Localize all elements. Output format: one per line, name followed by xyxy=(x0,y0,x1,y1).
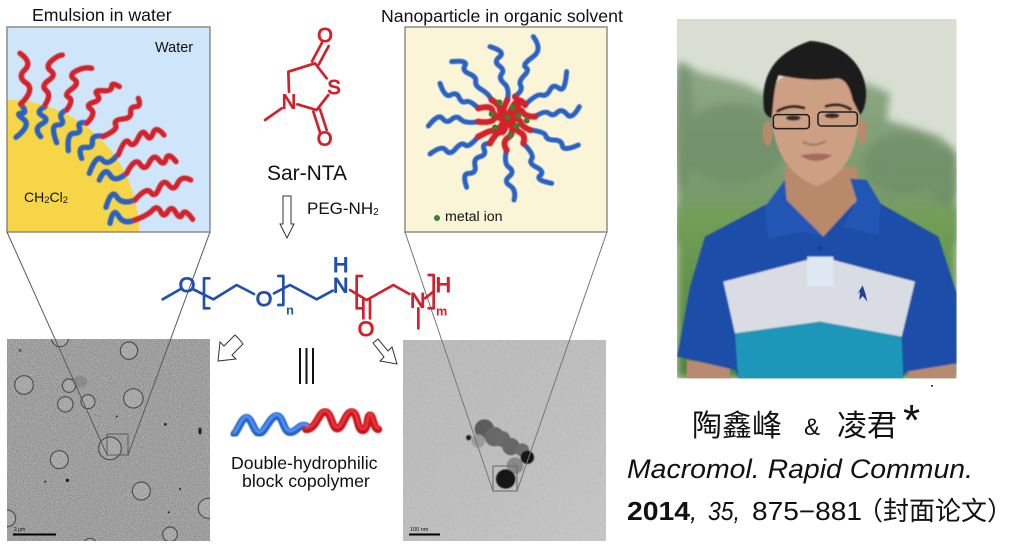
PEG block: H xyxy=(333,253,348,277)
citation: 2014 xyxy=(627,496,691,526)
asterisk: * xyxy=(903,396,920,445)
blue corona arms xyxy=(428,37,579,200)
molecule: Sar-NTA: O xyxy=(317,128,332,150)
legend: metal ion: metal ion xyxy=(445,209,503,225)
molecule: Sar-NTA: N xyxy=(282,92,296,114)
equivalence bars xyxy=(299,348,314,384)
citation: 35, xyxy=(708,496,740,526)
heading: emulsion in water: Emulsion in water xyxy=(32,5,172,25)
collar xyxy=(765,178,881,238)
caption: double-hydrophilic block copolymer: Double-hydrophilic xyxy=(231,453,378,473)
photo: portrait xyxy=(673,19,957,380)
background trees xyxy=(677,62,957,243)
shirt teal band xyxy=(735,322,903,380)
label: water: Water xyxy=(155,40,193,56)
metal ions xyxy=(489,99,530,138)
label: CH2Cl2: Cl xyxy=(50,189,63,205)
micelle with metal ions xyxy=(428,37,579,200)
ears xyxy=(763,121,772,146)
hair xyxy=(763,41,866,118)
PEG block: N xyxy=(333,273,348,297)
shirt white band xyxy=(723,260,915,337)
PEG block: O xyxy=(179,273,195,297)
face xyxy=(771,69,859,186)
placket xyxy=(807,257,833,286)
shirt logo xyxy=(857,285,867,302)
caption: double-hydrophilic block copolymer: block copolymer xyxy=(242,471,370,491)
panel background: water xyxy=(7,27,210,232)
molecule: Sar-NTA: S xyxy=(327,77,341,99)
caption: double-hydrophilic block copolymer xyxy=(231,453,378,491)
label: CH2Cl2: 2 xyxy=(63,195,68,206)
polysarcosine block: N xyxy=(410,288,425,312)
mouth xyxy=(800,153,833,161)
PEG block: O xyxy=(256,287,272,311)
molecule: Sar-NTA xyxy=(265,25,341,150)
label: CH2Cl2: CH xyxy=(24,189,44,205)
arrow: to emulsion image xyxy=(218,335,243,361)
tick mark xyxy=(931,385,933,386)
arms xyxy=(687,360,955,380)
panel border xyxy=(7,27,210,232)
eyes xyxy=(786,115,801,121)
panel: emulsion in water xyxy=(6,8,211,233)
molecule: Sar-NTA: O xyxy=(317,25,333,47)
eyebrows xyxy=(777,105,852,112)
darker tree masses xyxy=(673,63,957,207)
citation: （封面论文） xyxy=(857,496,1013,526)
dark specks xyxy=(18,349,202,513)
polysarcosine block: O xyxy=(358,317,374,341)
polysarcosine block xyxy=(350,273,451,341)
PEG block: n xyxy=(286,304,294,318)
label: Sar-NTA: Sar-NTA xyxy=(267,162,347,185)
emulsion droplets xyxy=(7,339,210,541)
background grass xyxy=(677,207,957,378)
icon: copolymer ribbon xyxy=(234,411,378,434)
TEM image: emulsion xyxy=(7,339,210,541)
label: PEG-NH2: PEG-NH xyxy=(307,199,373,218)
copolymer chains at the droplet interface xyxy=(16,53,193,223)
scale bar: 2 um: 2 μm xyxy=(14,527,25,533)
droplet: dichloromethane phase xyxy=(8,100,139,232)
shirt xyxy=(677,203,957,378)
nose shadow xyxy=(803,141,826,145)
label: CH2Cl2: 2 xyxy=(44,195,50,206)
polysarcosine block: m xyxy=(436,304,447,318)
citation: , xyxy=(690,496,697,526)
polysarcosine block: H xyxy=(436,273,451,297)
person xyxy=(677,41,957,380)
shirt button xyxy=(818,246,822,250)
authors xyxy=(692,396,920,445)
citation: 875−881 xyxy=(752,496,862,526)
nanoparticle cluster xyxy=(466,419,534,489)
panel: nanoparticle in organic solvent xyxy=(381,6,623,232)
authors: & xyxy=(804,414,820,441)
background sky xyxy=(677,19,957,378)
scale bar: 100 nm xyxy=(409,527,440,536)
heading: nanoparticle in organic solvent: Nanoparticle in organic solvent xyxy=(381,6,623,26)
arrow: to nanoparticle image xyxy=(373,339,397,364)
neck xyxy=(785,167,860,237)
label: PEG-NH2: 2 xyxy=(373,207,379,218)
journal name: Macromol. Rapid Commun. xyxy=(627,454,973,484)
TEM image: nanoparticles xyxy=(403,340,606,541)
chemical structure: PEG-b-PSar xyxy=(163,253,451,341)
authors: 陶鑫峰 xyxy=(692,410,782,443)
glasses xyxy=(773,112,857,129)
red core arms xyxy=(478,97,535,150)
authors: 凌君 xyxy=(837,410,897,443)
scale bar: 2 um xyxy=(13,527,56,536)
arrow: reaction xyxy=(280,196,294,238)
zoom guide lines xyxy=(7,232,607,491)
panel background: organic solvent xyxy=(405,27,607,232)
citation xyxy=(627,496,1013,526)
scale bar: 100 nm: 100 nm xyxy=(410,527,429,533)
PEG block xyxy=(163,253,348,318)
